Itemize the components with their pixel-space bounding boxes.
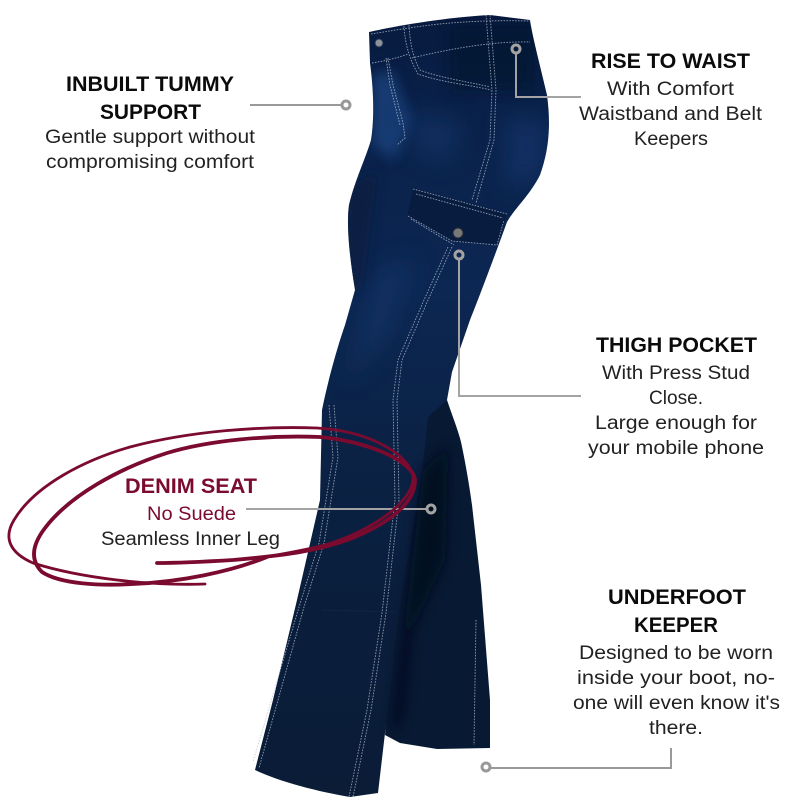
callout: rise to waist: RISE TO WAIST — [591, 50, 750, 73]
callout: rise to waist — [579, 50, 763, 150]
leader: thigh pocket — [455, 251, 581, 396]
callout: underfoot keeper: UNDERFOOT — [608, 586, 746, 609]
callout: denim seat: Seamless Inner Leg — [101, 529, 280, 550]
callout: underfoot keeper — [573, 586, 780, 739]
back leg dark crease — [392, 445, 448, 735]
callout: inbuilt tummy support — [45, 73, 256, 173]
leader: rise to waist — [512, 45, 581, 97]
callout: underfoot keeper: there. — [649, 718, 703, 739]
back leg — [385, 370, 490, 749]
callout: underfoot keeper: inside your boot, no- — [577, 668, 775, 689]
callout: thigh pocket: Close. — [649, 388, 703, 409]
callout: denim seat — [101, 475, 280, 550]
callout: rise to waist: Waistband and Belt — [579, 104, 763, 125]
leader: underfoot keeper — [482, 748, 671, 771]
callout: thigh pocket — [588, 334, 764, 459]
callout: denim seat: DENIM SEAT — [125, 475, 257, 498]
stitching — [253, 15, 530, 797]
front leg and hip — [255, 15, 549, 797]
callout: denim seat: No Suede — [147, 504, 236, 525]
callout: thigh pocket: your mobile phone — [588, 438, 764, 459]
waist button — [375, 39, 383, 47]
callout: thigh pocket: With Press Stud — [602, 363, 750, 384]
callout: underfoot keeper: one will even know it's — [573, 693, 780, 714]
callout: rise to waist: With Comfort — [607, 79, 735, 100]
callout: thigh pocket: Large enough for — [595, 413, 758, 434]
leader: denim seat — [246, 505, 435, 513]
callout: inbuilt tummy support: INBUILT TUMMY — [66, 73, 234, 96]
pants photo illustration — [253, 15, 550, 797]
callout: thigh pocket: THIGH POCKET — [596, 334, 757, 357]
pocket press stud — [453, 228, 463, 238]
callout: inbuilt tummy support: compromising comfort — [46, 152, 255, 173]
callout: inbuilt tummy support: SUPPORT — [100, 101, 201, 124]
callout: rise to waist: Keepers — [634, 129, 708, 150]
thigh pocket flap — [407, 188, 507, 245]
fabric shading — [345, 25, 550, 385]
callout: inbuilt tummy support: Gentle support without — [45, 127, 256, 148]
callout: underfoot keeper: Designed to be worn — [579, 643, 773, 664]
leader: inbuilt tummy support — [250, 101, 350, 109]
callout: underfoot keeper: KEEPER — [634, 614, 718, 637]
hand-drawn circle highlight — [9, 428, 415, 585]
